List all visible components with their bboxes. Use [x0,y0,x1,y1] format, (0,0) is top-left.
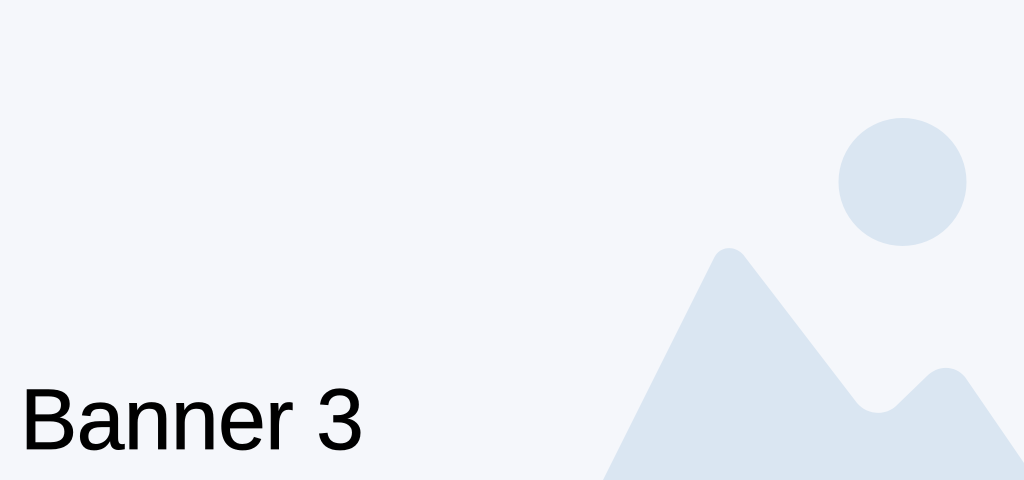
title: Banner 3 [20,372,364,468]
icon: mountains [603,248,1024,480]
icon: sun circle [838,118,966,246]
